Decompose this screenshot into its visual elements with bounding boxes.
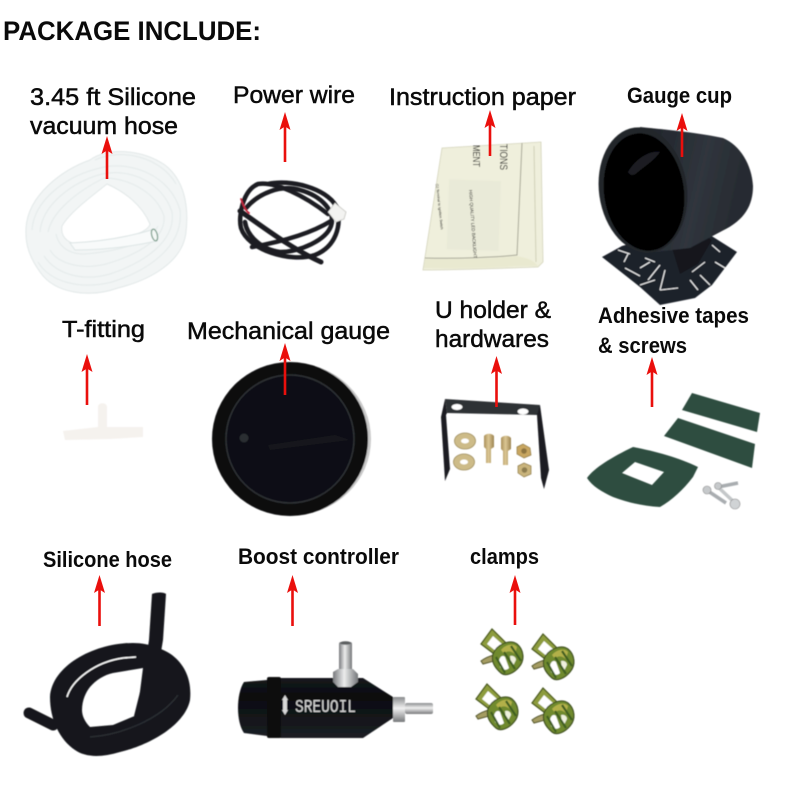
image: folded paper: TIONS bbox=[497, 144, 509, 170]
item: power wire bbox=[233, 82, 355, 262]
image: folded paper: (1) Terminal to Ignition Switch bbox=[435, 184, 444, 230]
image: four clamps bbox=[476, 629, 574, 734]
image: boost controller body bbox=[238, 641, 433, 738]
arrow: silicone hose bbox=[94, 575, 105, 626]
label: U holder and hardware bbox=[435, 297, 551, 353]
arrow: gauge cup bbox=[676, 113, 688, 157]
label: instruction paper: Instruction paper bbox=[389, 84, 576, 111]
item: instruction paper bbox=[389, 84, 576, 270]
label: mechanical gauge: Mechanical gauge bbox=[187, 318, 390, 345]
arrow: T-fitting bbox=[82, 354, 92, 405]
arrow: mechanical gauge bbox=[280, 343, 290, 395]
arrow: U holder bbox=[491, 356, 502, 407]
item: U holder and hardware bbox=[435, 297, 551, 489]
image: power wire loop bbox=[240, 183, 338, 262]
icon: white connector bbox=[328, 203, 346, 222]
item: silicone hose bbox=[29, 547, 190, 756]
label: U holder and hardware: hardwares bbox=[435, 326, 549, 353]
item: clamps bbox=[470, 544, 574, 734]
image: screws bbox=[703, 482, 740, 509]
arrow: power wire bbox=[280, 112, 290, 162]
item: mechanical gauge bbox=[187, 318, 390, 516]
label: adhesive tapes and screws: Adhesive tapes bbox=[598, 303, 749, 328]
label: vacuum hose: 3.45 ft Silicone bbox=[30, 84, 196, 111]
arrow: adhesive tapes bbox=[646, 357, 658, 407]
image: T-fitting bbox=[63, 403, 143, 440]
label: boost controller: Boost controller bbox=[238, 544, 399, 569]
item: vacuum hose bbox=[26, 84, 196, 293]
image: gauge cup and stand bbox=[591, 121, 753, 305]
image: adhesive tapes bbox=[587, 393, 760, 507]
label: gauge cup: Gauge cup bbox=[627, 83, 732, 108]
arrow: vacuum hose bbox=[102, 136, 112, 179]
label: adhesive tapes and screws: & screws bbox=[598, 333, 687, 358]
label: power wire: Power wire bbox=[233, 82, 355, 109]
image: washers, bolts and nuts bbox=[454, 433, 531, 477]
image: folded paper: HIGH QUALITY LED BACKLIGHT bbox=[468, 190, 478, 259]
title: PACKAGE INCLUDE: bbox=[3, 16, 261, 46]
arrow: clamps bbox=[510, 575, 520, 625]
item: boost controller bbox=[238, 544, 433, 738]
image: black silicone hose bbox=[29, 592, 190, 756]
image: boost controller body: SREUOIL bbox=[295, 698, 356, 718]
label: adhesive tapes and screws bbox=[598, 303, 749, 358]
arrow: boost controller bbox=[287, 575, 298, 626]
label: vacuum hose bbox=[30, 84, 196, 140]
image: gauge face bbox=[212, 362, 371, 516]
label: U holder and hardware: U holder & bbox=[435, 297, 551, 324]
image: folded paper bbox=[423, 142, 543, 270]
image: vacuum hose coil bbox=[26, 152, 187, 293]
label: silicone hose: Silicone hose bbox=[43, 547, 172, 572]
image: folded paper: MENT bbox=[470, 145, 481, 167]
image: U bracket bbox=[441, 399, 549, 489]
arrow: instruction paper bbox=[484, 110, 496, 156]
label: clamps: clamps bbox=[470, 544, 539, 569]
label: T-fitting: T-fitting bbox=[62, 316, 145, 342]
item: adhesive tapes and screws bbox=[587, 303, 760, 509]
item: T-fitting bbox=[62, 316, 145, 440]
label: vacuum hose: vacuum hose bbox=[30, 113, 178, 140]
item: gauge cup bbox=[591, 83, 753, 305]
